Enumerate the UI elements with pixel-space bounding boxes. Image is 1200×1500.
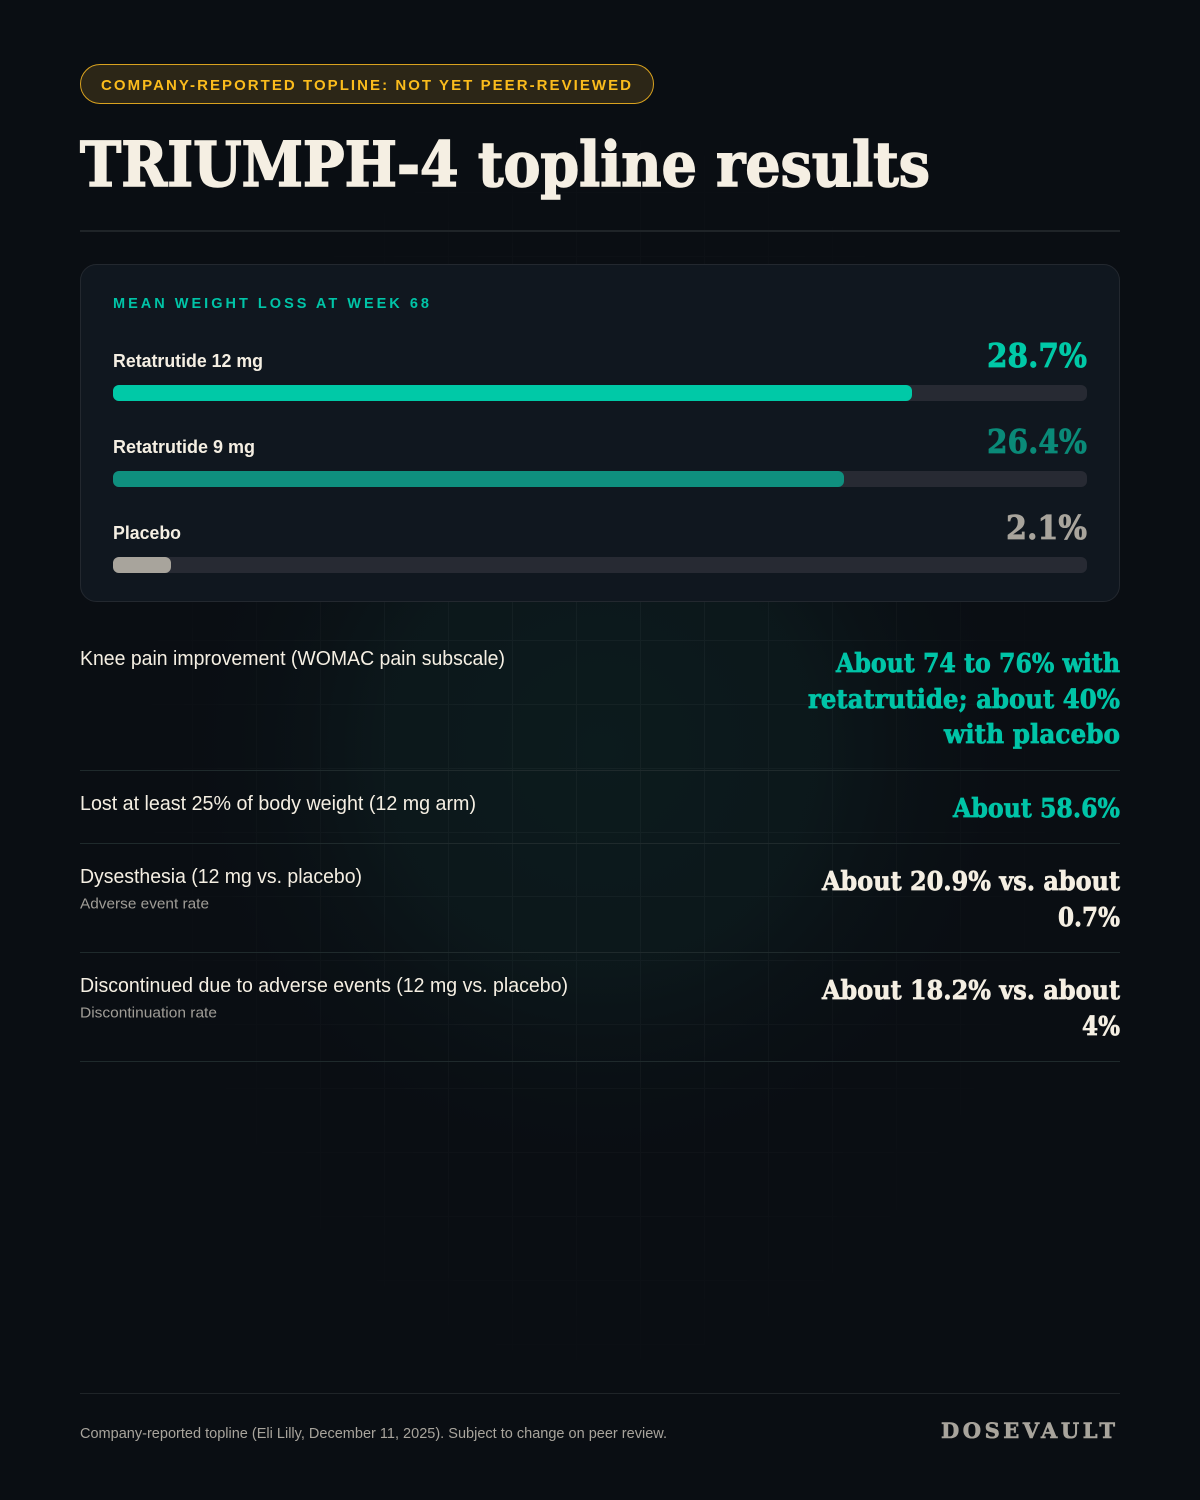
bar: placebo: 2.1%: [1006, 508, 1087, 547]
bar: retatrutide 12 mg: Retatrutide 12 mg: [113, 350, 263, 371]
row: knee pain improvement: [80, 647, 1120, 750]
row: dysesthesia: [80, 865, 1120, 933]
footer logo: DoseVault: DOSEVAULT: [941, 1418, 1115, 1443]
row: dysesthesia: Dysesthesia (12 mg vs. placebo): [80, 865, 362, 888]
row: dysesthesia: 0.7%: [1058, 903, 1120, 933]
row: lost at least 25% of body weight: [80, 792, 1120, 824]
bar: retatrutide 9 mg: 26.4%: [987, 422, 1087, 461]
row: lost at least 25% of body weight: Lost at least 25% of body weight (12 mg arm): [80, 792, 476, 815]
row: discontinued due to adverse events: [80, 974, 1120, 1042]
panel heading: MEAN WEIGHT LOSS AT WEEK 68: [113, 296, 429, 312]
row: discontinued due to adverse events: Discontinued due to adverse events (12 mg vs. placebo): [80, 974, 568, 997]
bar: retatrutide 12 mg: [113, 336, 1087, 401]
bar: retatrutide 9 mg: Retatrutide 9 mg: [113, 436, 255, 457]
bar: placebo: [113, 508, 1087, 573]
row: knee pain improvement: retatrutide; about 40%: [808, 685, 1120, 715]
row: knee pain improvement: with placebo: [943, 720, 1120, 750]
panel: mean weight loss at week 68: [80, 264, 1120, 602]
title: TRIUMPH-4 topline results: [80, 128, 930, 201]
bar: retatrutide 9 mg: [113, 422, 1087, 487]
row: knee pain improvement: Knee pain improvement (WOMAC pain subscale): [80, 647, 505, 670]
bar: placebo: Placebo: [113, 522, 181, 543]
row: discontinued due to adverse events: 4%: [1082, 1012, 1120, 1042]
row: discontinued due to adverse events: About 18.2% vs. about: [821, 976, 1120, 1006]
row: knee pain improvement: About 74 to 76% with: [835, 649, 1120, 679]
row: dysesthesia: Adverse event rate: [80, 896, 209, 912]
row: discontinued due to adverse events: Discontinuation rate: [80, 1006, 217, 1022]
bar: retatrutide 12 mg: 28.7%: [987, 336, 1087, 375]
footer note: Company-reported topline (Eli Lilly, December 11, 2025). Subject to change on peer review.: [80, 1426, 667, 1442]
row: lost at least 25% of body weight: About 58.6%: [952, 794, 1120, 824]
badge: company-reported topline: COMPANY-REPORTED TOPLINE: NOT YET PEER-REVIEWED: [101, 77, 631, 94]
row: dysesthesia: About 20.9% vs. about: [821, 867, 1120, 897]
badge: company-reported topline: [80, 64, 654, 104]
